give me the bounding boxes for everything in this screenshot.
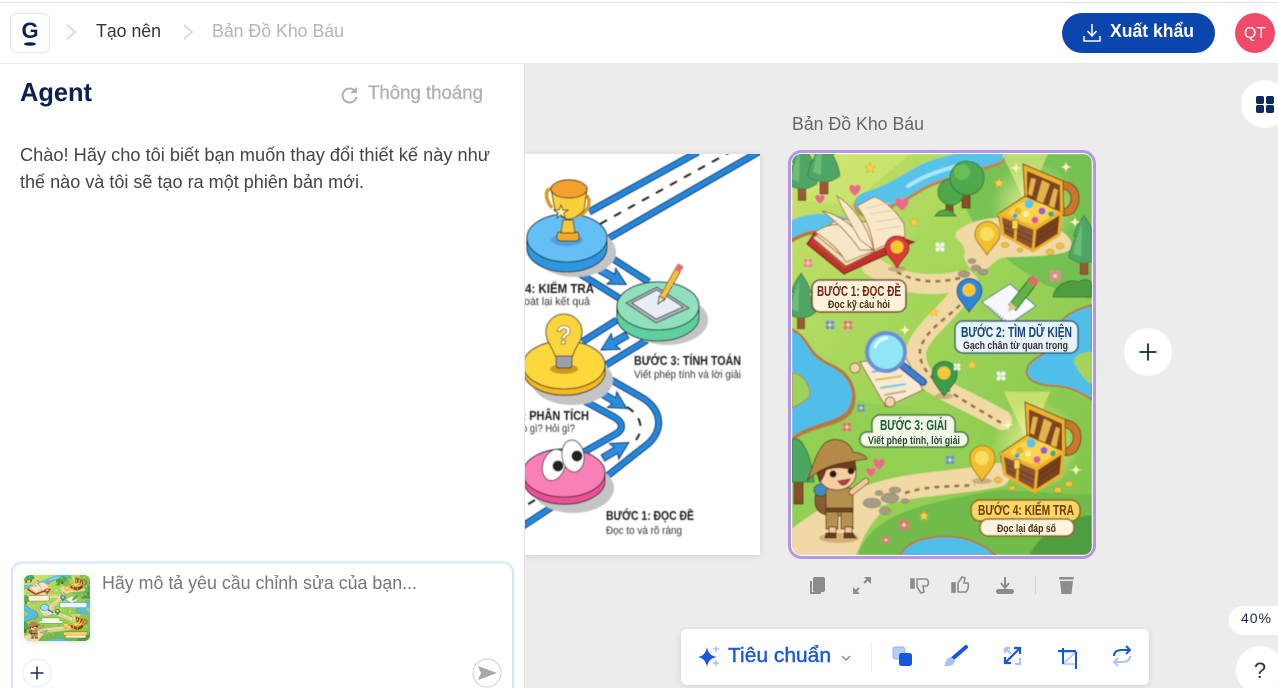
- add image button: [1124, 328, 1172, 376]
- help button: [1236, 646, 1278, 688]
- logo: G: [21, 18, 39, 43]
- icon: light bulb: ?: [556, 320, 572, 350]
- help button: ?: [1254, 658, 1266, 683]
- step labels left card: Viết phép tính và lời giải: [634, 369, 741, 381]
- illustration: treasure map: [785, 132, 1099, 556]
- avatar: [1235, 13, 1275, 53]
- map labels: [817, 282, 1074, 535]
- avatar: QT: [1244, 25, 1266, 42]
- prompt input box: [12, 562, 513, 688]
- icon: sparkle: [698, 646, 719, 667]
- toolbar: [681, 629, 1149, 685]
- icon: trash: [1059, 577, 1074, 594]
- action icons row: [810, 576, 1074, 594]
- step labels left card: BƯỚC 3: TÍNH TOÁN: [634, 353, 741, 368]
- road illustration: [525, 154, 760, 538]
- icon: download: [996, 577, 1014, 594]
- placeholder: Hãy mô tả yêu cầu chỉnh sửa của bạn...: [102, 573, 417, 593]
- map labels: Viết phép tính, lời giải: [868, 435, 960, 447]
- step labels left card: Soát lại kết quả: [517, 296, 591, 308]
- step labels left card: BƯỚC 2: PHÂN TÍCH: [479, 408, 589, 423]
- breadcrumb: [67, 21, 344, 41]
- map labels: Đọc kỹ câu hỏi: [828, 299, 890, 311]
- greeting message: Chào! Hãy cho tôi biết bạn muốn thay đổi thiết kế này như: [20, 145, 490, 165]
- greeting message: thế nào và tôi sẽ tạo ra một phiên bản mới.: [20, 172, 364, 192]
- send button: [473, 659, 501, 687]
- map labels: BƯỚC 2: TÌM DỮ KIỆN: [961, 323, 1072, 341]
- add button: [23, 659, 51, 687]
- step labels left card: Đọc to và rõ ràng: [606, 525, 682, 537]
- map labels: BƯỚC 1: ĐỌC ĐỀ: [817, 282, 901, 300]
- canvas title: Bản Đồ Kho Báu: [792, 114, 924, 134]
- icon: swap: [1114, 646, 1130, 666]
- clear button: Thông thoáng: [368, 83, 483, 104]
- icon: resize: [1005, 648, 1020, 664]
- zoom level: 40%: [1241, 610, 1271, 626]
- thumbnail: [22, 571, 92, 641]
- breadcrumb: Tạo nên: [96, 21, 161, 41]
- step labels left card: BƯỚC 1: ĐỌC ĐỀ: [606, 508, 694, 523]
- panel: agent sidebar: [0, 63, 525, 688]
- icon: crop: [1058, 648, 1076, 669]
- icon: copy: [810, 577, 825, 594]
- icon: trophy: [546, 180, 589, 246]
- icon: brush: [944, 647, 966, 666]
- top bar: [0, 0, 1278, 64]
- step labels left card: Cho gì? Hỏi gì?: [510, 423, 575, 435]
- disks: [523, 214, 708, 513]
- map labels: Gạch chân từ quan trọng: [963, 340, 1068, 352]
- icon: layers: [893, 647, 912, 666]
- icon: like: [952, 577, 968, 592]
- panel: selected treasure map: [785, 132, 1099, 558]
- icon: chevron: [842, 656, 850, 660]
- icon: dislike: [911, 579, 928, 593]
- icon: light bulb: [546, 314, 582, 374]
- step labels left card: [525, 280, 742, 538]
- icon: eyes: [539, 439, 586, 484]
- breadcrumb: Bản Đồ Kho Báu: [212, 21, 344, 41]
- map labels: BƯỚC 4: KIỂM TRA: [978, 501, 1074, 519]
- grid view button: [1241, 80, 1278, 128]
- icon: expand: [853, 577, 871, 594]
- logo: [10, 14, 50, 52]
- heading: Agent: Agent: [20, 77, 92, 107]
- panel: left card previous design: [525, 154, 762, 558]
- map labels: BƯỚC 3: GIẢI: [880, 416, 947, 434]
- step labels left card: BƯỚC 4: KIỂM TRA: [486, 281, 595, 296]
- export button: Xuất khẩu: [1110, 21, 1194, 41]
- mode label: Tiêu chuẩn: [728, 645, 831, 667]
- map labels: Đọc lại đáp số: [997, 523, 1056, 535]
- export button: [1062, 13, 1215, 53]
- zoom level: [1229, 606, 1278, 635]
- greeting message: [20, 145, 490, 192]
- icon: tablet and pencil: [626, 265, 689, 323]
